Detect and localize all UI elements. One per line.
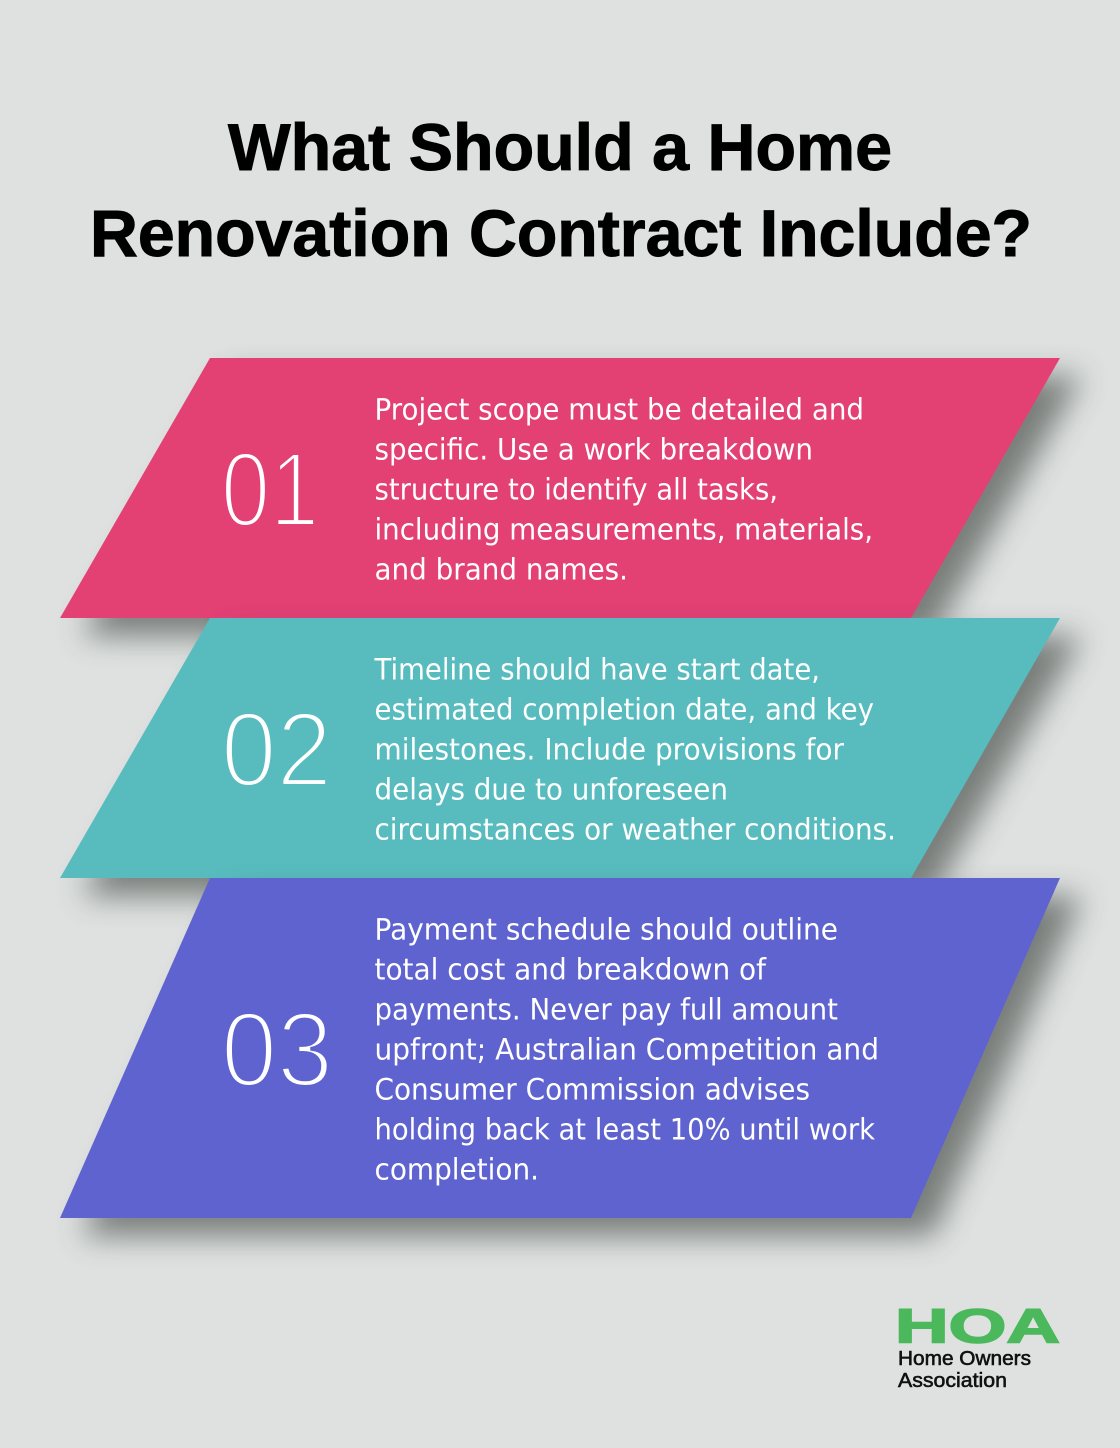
title: What Should a Home: [228, 111, 892, 184]
step 02 text: Timeline should have start date,: [374, 652, 820, 686]
panel: step 02 timeline: [60, 618, 1082, 896]
step 01 text: [374, 392, 873, 586]
step 01 text: including measurements, materials,: [374, 512, 873, 546]
logo: HOA Home Owners Association: Home Owners: [898, 1347, 1031, 1370]
number 02: 02: [221, 691, 332, 809]
step 02 text: milestones. Include provisions for: [374, 732, 845, 766]
step 01 text: and brand names.: [374, 552, 628, 586]
step 02 text: estimated completion date, and key: [374, 692, 874, 726]
number 01: 01: [221, 431, 319, 549]
panel: step 01 project scope: [60, 358, 1082, 636]
step 02 text: [374, 652, 896, 846]
title: Renovation Contract Include?: [90, 197, 1032, 270]
step 03 text: Consumer Commission advises: [374, 1072, 810, 1106]
step 02 text: circumstances or weather conditions.: [374, 812, 896, 846]
step 03 text: total cost and breakdown of: [374, 952, 767, 986]
step 03 text: payments. Never pay full amount: [374, 992, 838, 1026]
number 03: 03: [221, 991, 333, 1109]
step 01 text: structure to identify all tasks,: [374, 472, 778, 506]
step 03 text: upfront; Australian Competition and: [374, 1032, 879, 1066]
panel: step 03 payment schedule: [60, 878, 1082, 1236]
step 01 text: Project scope must be detailed and: [374, 392, 864, 426]
step 03 text: Payment schedule should outline: [374, 912, 838, 946]
logo: HOA Home Owners Association: [895, 1300, 1060, 1392]
logo: HOA Home Owners Association: Association: [898, 1369, 1007, 1392]
step 03 text: [374, 912, 879, 1186]
step 01 text: specific. Use a work breakdown: [374, 432, 813, 466]
step 03 text: holding back at least 10% until work: [374, 1112, 875, 1146]
step 02 text: delays due to unforeseen: [374, 772, 728, 806]
logo: HOA Home Owners Association: HOA: [895, 1300, 1060, 1354]
title: [90, 111, 1032, 270]
step 03 text: completion.: [374, 1152, 539, 1186]
